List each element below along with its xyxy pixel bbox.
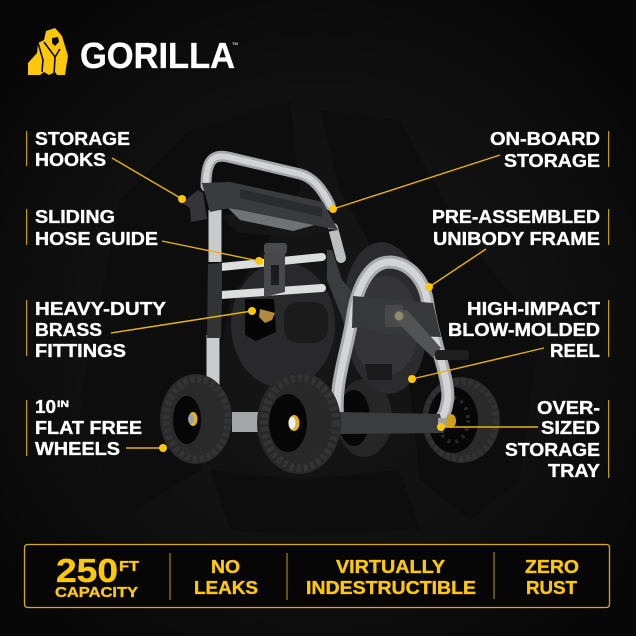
no leaks	[194, 557, 258, 598]
virtually indestructible: VIRTUALLY	[336, 557, 445, 577]
label: oversized storage tray	[505, 398, 609, 481]
label: storage hooks: STORAGE	[35, 129, 130, 149]
label: sliding hose guide: HOSE GUIDE	[35, 229, 158, 249]
left upright tube	[213, 210, 215, 385]
label: sliding hose guide	[26, 207, 158, 249]
left frame plate	[207, 263, 222, 338]
callout lines	[111, 155, 544, 448]
250 ft capacity: CAPACITY	[55, 584, 138, 601]
label: sliding hose guide: SLIDING	[35, 207, 115, 227]
label: oversized storage tray: SIZED	[541, 418, 600, 438]
sliding bars	[221, 257, 322, 295]
crank	[385, 305, 469, 360]
crank handle	[435, 350, 469, 360]
on-board storage tray	[202, 182, 338, 238]
virtually indestructible: INDESTRUCTIBLE	[306, 578, 476, 598]
center bracket	[327, 250, 357, 330]
arch frame	[337, 262, 448, 424]
background gorilla silhouette	[80, 100, 540, 536]
label: blow-molded reel: BLOW-MOLDED	[448, 320, 600, 340]
bottom feature bar	[24, 544, 610, 608]
zero rust: ZERO	[525, 557, 579, 577]
brass fittings	[259, 309, 275, 323]
zero rust: RUST	[526, 578, 577, 598]
label: unibody frame: PRE-ASSEMBLED	[432, 207, 600, 227]
product: hose reel cart	[160, 156, 500, 474]
250 ft capacity: FT	[119, 558, 139, 575]
label: unibody frame	[432, 207, 609, 249]
label: flat free wheels: WHEELS	[35, 439, 120, 459]
label: brass fittings: BRASS	[35, 320, 102, 340]
right reel disc	[338, 239, 432, 397]
sliding hose guide	[264, 243, 287, 297]
storage tray	[340, 412, 456, 434]
label: flat free wheels	[26, 397, 142, 459]
wordmark: GORILLA	[80, 35, 235, 76]
left reel disc	[231, 262, 335, 388]
no leaks: LEAKS	[194, 578, 258, 598]
icon: gorilla	[28, 28, 68, 75]
callout dots	[159, 195, 445, 452]
label: flat free wheels: IN	[57, 399, 69, 409]
label: oversized storage tray: TRAY	[548, 461, 600, 481]
label: flat free wheels: 10	[35, 397, 56, 417]
zero rust	[525, 557, 579, 598]
label: unibody frame: UNIBODY FRAME	[433, 229, 600, 249]
storage hooks	[182, 190, 207, 222]
label: flat free wheels: FLAT FREE	[35, 418, 142, 438]
label: brass fittings	[26, 299, 166, 361]
label: brass fittings: FITTINGS	[35, 341, 126, 361]
logo	[28, 28, 238, 76]
front right wheel	[422, 377, 500, 463]
250 ft capacity	[55, 552, 139, 601]
label: storage hooks	[26, 129, 130, 170]
250 ft capacity: 250	[56, 552, 118, 589]
virtually indestructible	[306, 557, 476, 598]
label: brass fittings: HEAVY-DUTY	[35, 299, 166, 319]
label: blow-molded reel	[448, 299, 609, 361]
label: on-board storage: ON-BOARD	[490, 129, 600, 149]
trademark: TM	[232, 41, 238, 46]
front center wheel	[257, 372, 341, 474]
label: on-board storage: STORAGE	[504, 151, 600, 171]
label: blow-molded reel: REEL	[550, 341, 600, 361]
label: blow-molded reel: HIGH-IMPACT	[467, 299, 600, 319]
label: oversized storage tray: OVER-	[537, 398, 600, 418]
label: oversized storage tray: STORAGE	[505, 440, 600, 460]
rear wheel	[336, 379, 392, 457]
label: on-board storage	[490, 129, 609, 171]
lower silver frame	[232, 412, 260, 432]
cross plate	[352, 296, 441, 337]
no leaks: NO	[211, 557, 240, 577]
front left wheel	[160, 374, 232, 464]
label: storage hooks: HOOKS	[35, 150, 106, 170]
handle tube	[206, 156, 341, 258]
